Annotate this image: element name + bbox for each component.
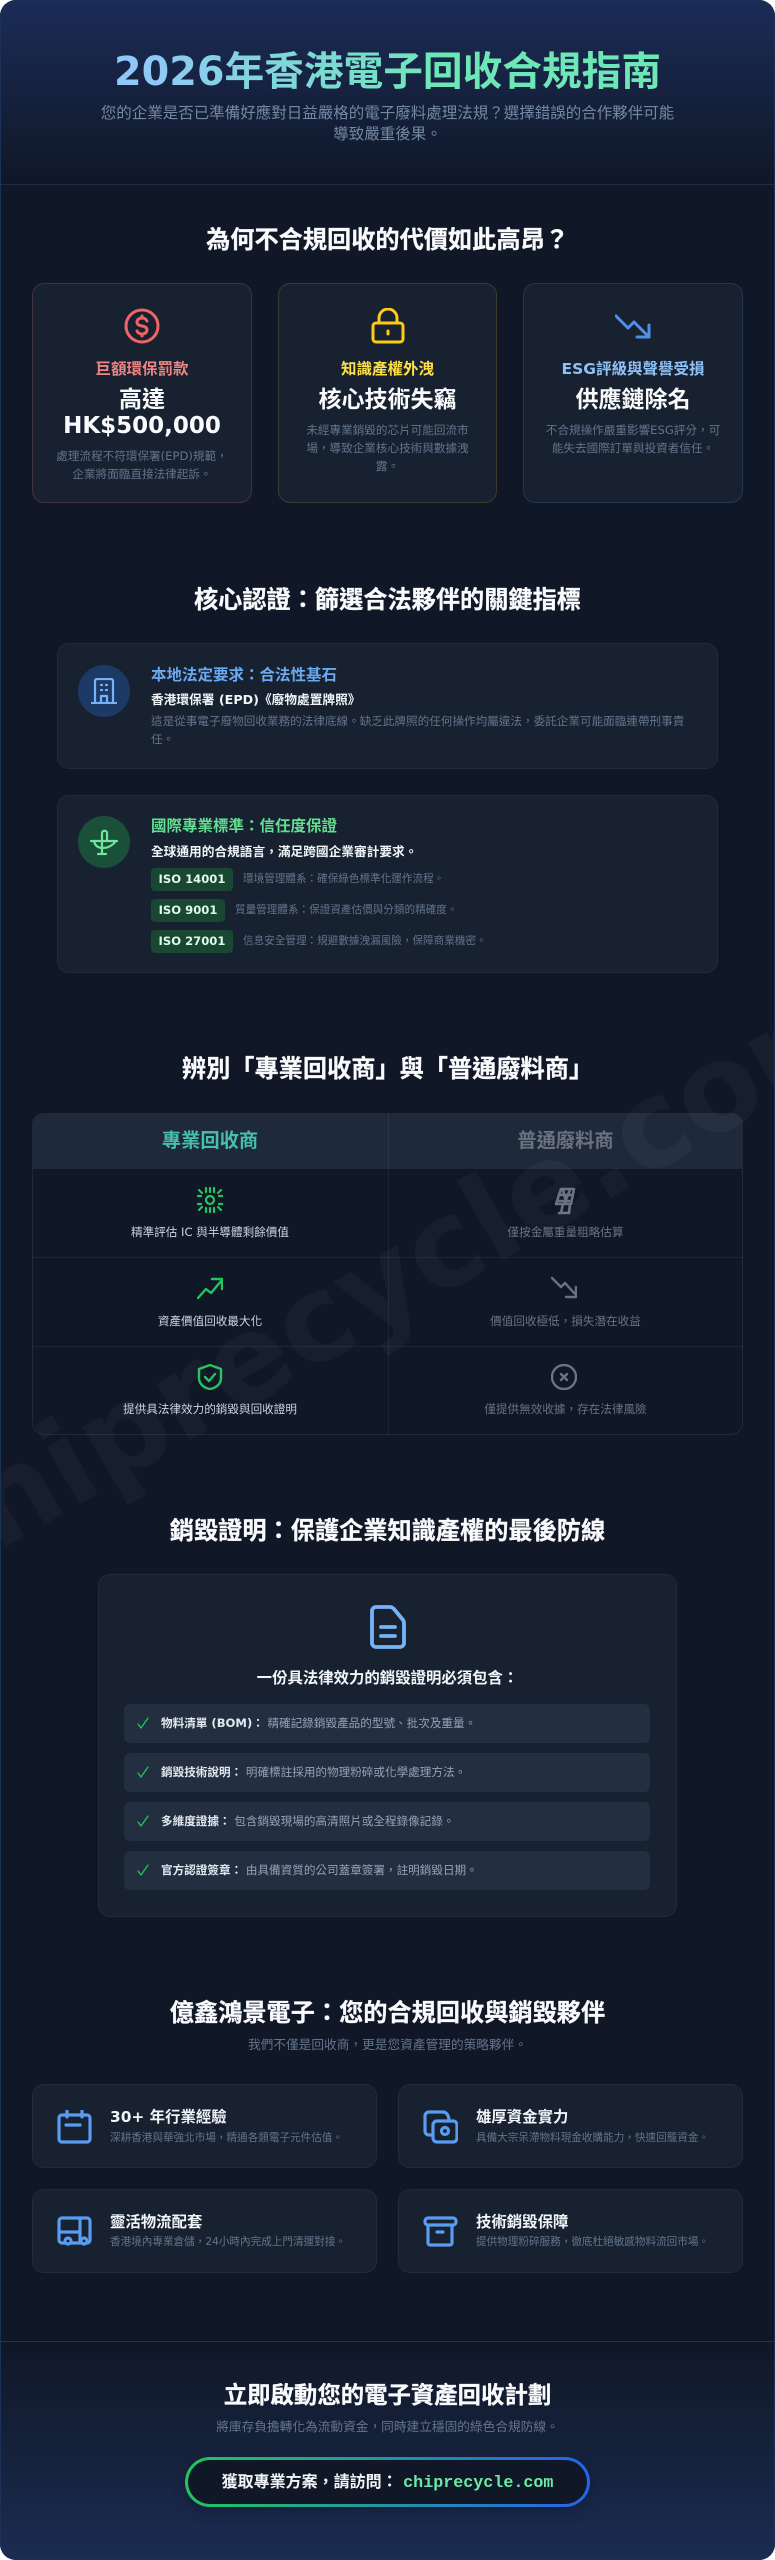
feature title: 雄厚資金實力 (476, 2108, 568, 2126)
table header (32, 1113, 743, 1169)
panel: local licence (57, 643, 718, 769)
requirements heading: 一份具法律效力的銷毀證明必須包含： (257, 1669, 518, 1687)
badge: ISO 9001: ISO 9001 (159, 903, 217, 917)
feature title: 30+ 年行業經驗 (110, 2108, 227, 2126)
icon: lock (372, 308, 404, 344)
text: ISO 27001: 信息安全管理：規避數據洩漏風險，保障商業機密。 (243, 935, 487, 947)
licence description (151, 714, 684, 746)
card description: 不合規操作嚴重影響ESG評分，可 (546, 423, 720, 437)
item: technology (124, 1753, 650, 1792)
button text: 獲取專業方案，請訪問： chiprecycle.com (222, 2472, 553, 2493)
text: weight only: 僅按金屬重量粗略估算 (508, 1225, 623, 1239)
icon: scrap weight (554, 1188, 576, 1214)
footer subtitle: 將庫存負擔轉化為流動資金，同時建立穩固的綠色合規防線。 (216, 2419, 559, 2434)
icon: scale emblem (78, 816, 130, 868)
card figure: 供應鏈除名 (576, 387, 690, 413)
text: precise valuation: 精準評估 IC 與半導體剩餘價值 (131, 1225, 289, 1239)
icon: trending down (551, 1276, 577, 1298)
panel: IP leak (278, 283, 497, 503)
text: ISO 9001: 質量管理體系：保證資產估價與分類的精確度。 (235, 904, 457, 916)
title: 2026年香港電子回收合規指南 (114, 49, 661, 95)
badge: ISO 9001 (151, 899, 225, 922)
icon: building (78, 665, 130, 717)
item: technology: 銷毀技術說明： 明確標註採用的物理粉碎或化學處理方法。 (161, 1765, 466, 1779)
icon: document (370, 1605, 406, 1649)
text: legal proof: 提供具法律效力的銷毀與回收證明 (123, 1402, 297, 1416)
partner subtitle: 我們不僅是回收商，更是您資產管理的策略夥伴。 (248, 2037, 527, 2052)
standards intro: 全球通用的合規語言，滿足跨國企業審計要求。 (151, 844, 417, 859)
card description: 未經專業銷毀的芯片可能回流市 (306, 423, 469, 437)
subtitle: 您的企業是否已準備好應對日益嚴格的電子廢料處理法規？選擇錯誤的合作夥伴可能 (101, 104, 674, 122)
column title: professional: 專業回收商 (162, 1129, 258, 1152)
heading: comparison: 辨別「專業回收商」與「普通廢料商」 (182, 1055, 593, 1083)
icon: shield check (198, 1364, 222, 1390)
card figure: 核心技術失竊 (318, 387, 456, 413)
panel: logistics (32, 2189, 377, 2273)
card figure: 高達 (119, 387, 165, 413)
panel: capital (398, 2084, 743, 2168)
icon: cash (423, 2110, 458, 2144)
item: seal (124, 1851, 650, 1890)
feature text: 香港境內專業倉儲，24小時內完成上門清運對接。 (110, 2236, 346, 2248)
subtitle: 導致嚴重後果。 (333, 125, 442, 143)
item: BOM: 物料清單 (BOM)： 精確記錄銷毀產品的型號、批次及重量。 (161, 1716, 476, 1730)
card description: 能失去國際訂單與投資者信任。 (552, 441, 714, 455)
feature text: 深耕香港與華強北市場，精通各類電子元件估值。 (110, 2132, 343, 2144)
licence description: 這是從事電子廢物回收業務的法律底線。缺乏此牌照的任何操作均屬違法，委託企業可能面臨連帶刑事責 (151, 714, 684, 728)
card title: ESG評級與聲譽受損 (562, 360, 704, 378)
footer heading: 立即啟動您的電子資產回收計劃 (224, 2381, 551, 2409)
card description: 處理流程不符環保署(EPD)規範， (56, 449, 228, 463)
heading: partner: 億鑫鴻景電子：您的合規回收與銷毀夥伴 (170, 1999, 605, 2027)
item: seal: 官方認證簽章： 由具備資質的公司蓋章簽署，註明銷毀日期。 (161, 1863, 478, 1877)
icon: trending down (615, 314, 651, 339)
panel: certificate requirements (98, 1574, 677, 1917)
heading: core certification: 核心認證：篩選合法夥伴的關鍵指標 (194, 586, 581, 614)
card title: 巨額環保罰款 (95, 360, 188, 378)
panel: comparison table (32, 1113, 743, 1435)
licence heading: 本地法定要求：合法性基石 (151, 666, 337, 684)
call to action button (185, 2457, 590, 2507)
subtitle (101, 104, 674, 143)
footer band (0, 2341, 775, 2560)
card figure: HK$500,000 (63, 413, 221, 439)
badge: ISO 27001: ISO 27001 (159, 934, 225, 948)
card description (306, 423, 469, 473)
licence name: 香港環保署 (EPD)《廢物處置牌照》 (151, 692, 360, 707)
icon: dollar circle (124, 308, 160, 344)
icon: trending up (197, 1278, 223, 1300)
badge: ISO 14001: ISO 14001 (159, 872, 225, 886)
feature title: 技術銷毀保障 (476, 2213, 568, 2231)
card description (546, 423, 720, 455)
card description: 場，導致企業核心技術與數據洩 (306, 441, 469, 455)
panel: ESG damage (523, 283, 743, 503)
card description: 企業將面臨直接法律起訴。 (72, 467, 212, 481)
heading: destruction certificate: 銷毀證明：保護企業知識產權的最後防線 (170, 1517, 605, 1545)
card description: 露。 (376, 459, 399, 473)
item: evidence: 多維度證據： 包含銷毀現場的高清照片或全程錄像記錄。 (161, 1814, 455, 1828)
card description (56, 449, 228, 481)
icon: truck (57, 2216, 92, 2246)
icon: cross circle (551, 1364, 577, 1390)
icon: archive box (423, 2216, 458, 2247)
item: evidence (124, 1802, 650, 1841)
card title: 知識產權外洩 (341, 360, 434, 378)
icon: precision chip (197, 1187, 223, 1213)
panel: experience (32, 2084, 377, 2168)
feature text: 具備大宗呆滯物料現金收購能力，快速回籠資金。 (476, 2132, 709, 2144)
heading: why non-compliance is costly: 為何不合規回收的代價如此高昂？ (206, 226, 569, 254)
header band (0, 0, 775, 185)
panel: destruction (398, 2189, 743, 2273)
panel: environmental fine (32, 283, 252, 503)
badge: ISO 27001 (151, 930, 233, 953)
column title: scrap dealer: 普通廢料商 (517, 1129, 614, 1152)
item: BOM (124, 1704, 650, 1743)
text: maximised value: 資產價值回收最大化 (158, 1314, 262, 1328)
text: invalid receipt: 僅提供無效收據，存在法律風險 (484, 1402, 647, 1416)
card figure (63, 387, 221, 439)
badge: ISO 14001 (151, 868, 233, 891)
text: low recovery: 價值回收極低，損失潛在收益 (490, 1314, 641, 1328)
text: ISO 14001: 環境管理體系：確保綠色標準化運作流程。 (243, 873, 444, 885)
feature text: 提供物理粉碎服務，徹底杜絕敏感物料流回市場。 (476, 2236, 709, 2248)
panel: international standards (57, 795, 718, 973)
icon: calendar (57, 2110, 92, 2144)
standards heading: 國際專業標準：信任度保證 (151, 817, 337, 835)
licence description: 任。 (151, 732, 174, 746)
feature title: 靈活物流配套 (110, 2213, 202, 2231)
